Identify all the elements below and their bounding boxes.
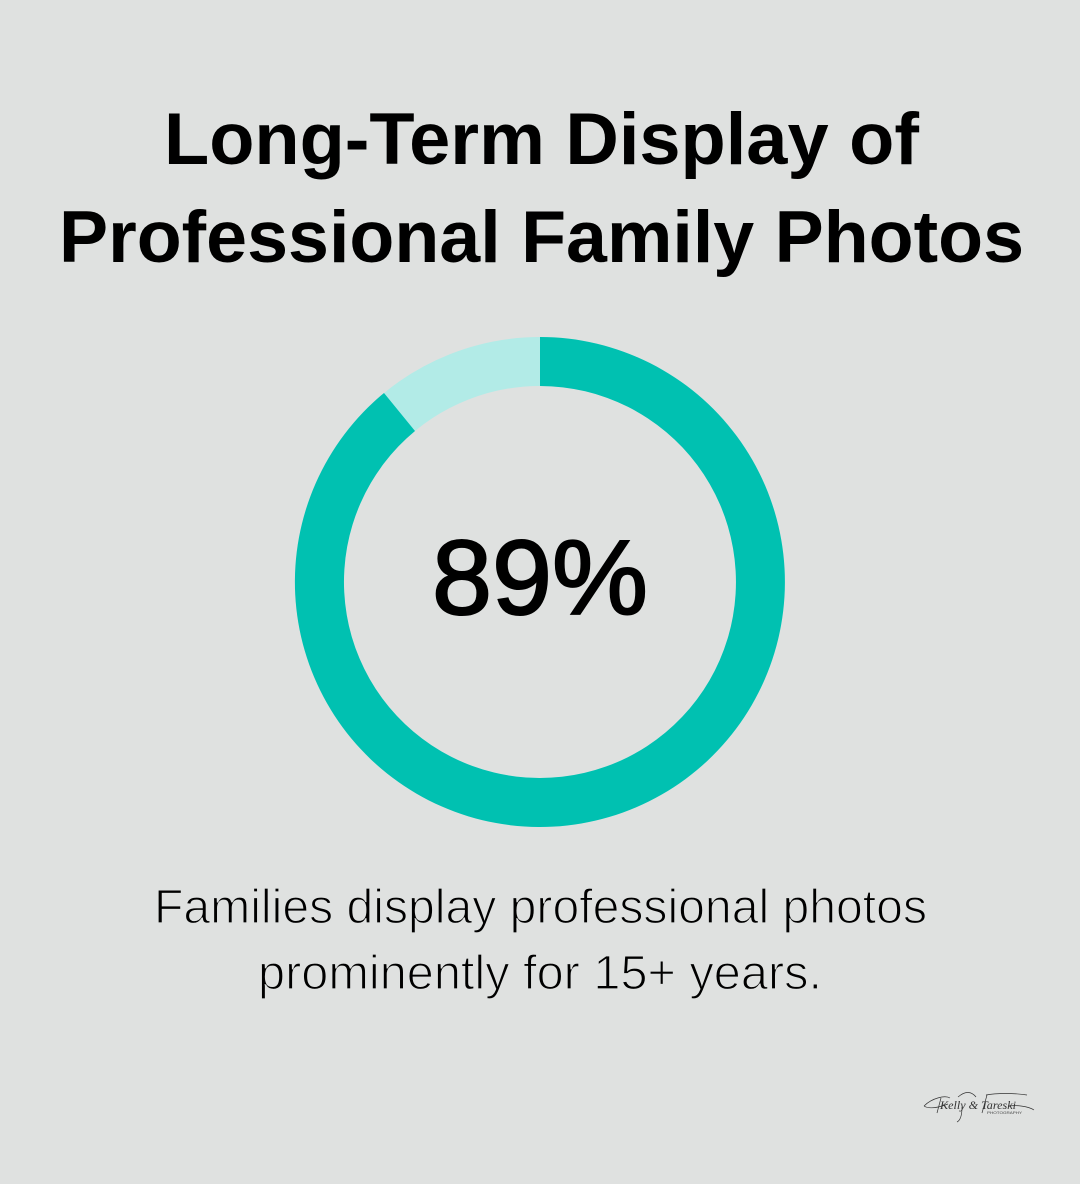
donut value arc: 89% xyxy=(295,337,785,827)
center value: 89% xyxy=(432,519,648,637)
logo subtitle: PHOTOGRAPHY xyxy=(987,1111,1023,1115)
signature flourishes xyxy=(924,1092,1034,1122)
donut chart: 89% xyxy=(295,337,785,827)
title: Long-Term Display of xyxy=(164,99,920,180)
caption xyxy=(154,881,927,1000)
title: Professional Family Photos xyxy=(59,197,1024,278)
signature name: Kelly & Tareski xyxy=(939,1098,1016,1112)
title xyxy=(59,99,1024,278)
caption: Families display professional photos xyxy=(154,881,927,934)
caption: prominently for 15+ years. xyxy=(258,947,822,1000)
logo: Kelly & Tareski Photography signature xyxy=(924,1092,1034,1122)
donut track: remaining 11% xyxy=(320,362,760,802)
